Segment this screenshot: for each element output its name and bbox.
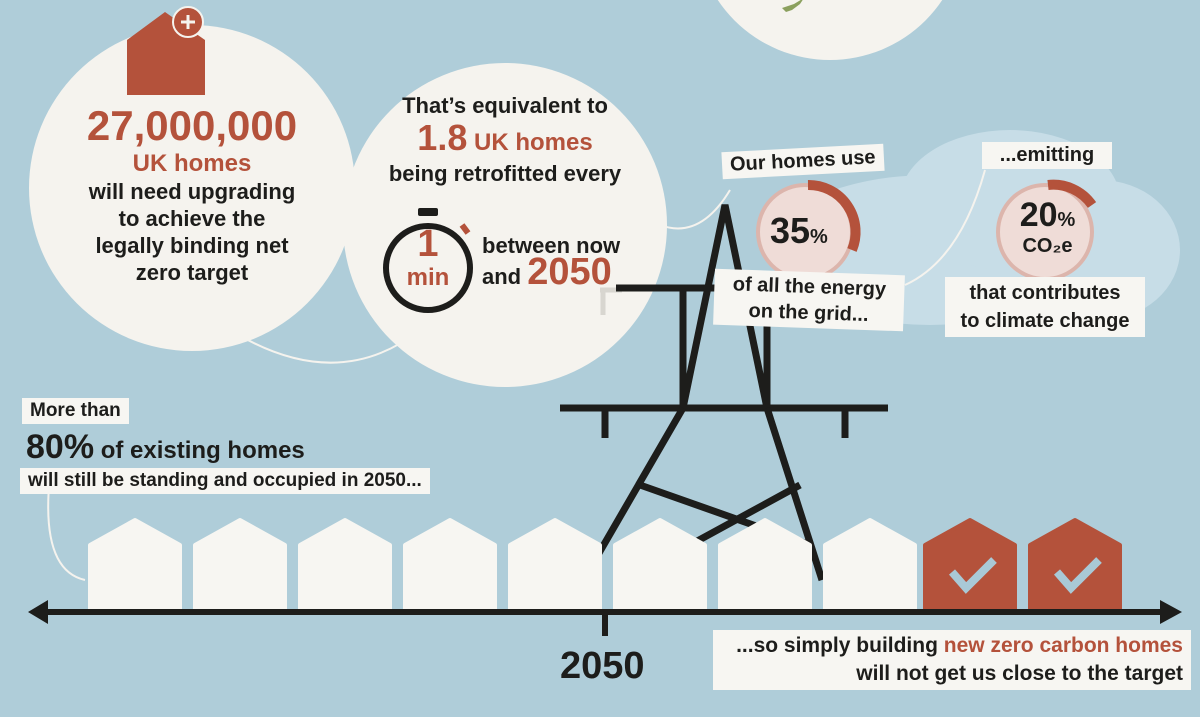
text: between now and 2050: and 2050 xyxy=(482,251,612,293)
text: 1 min xyxy=(407,223,449,291)
pylon xyxy=(560,205,888,580)
label: emitting xyxy=(982,142,1112,169)
text: 80% existing homes: 80% of existing homes xyxy=(26,428,305,466)
clouds xyxy=(770,130,1180,325)
label: 2050: 2050 xyxy=(560,645,645,687)
label: 20%: 20% xyxy=(1020,196,1075,234)
house icon xyxy=(127,7,205,95)
label: 35%: 35% xyxy=(770,210,828,251)
text: between now and 2050: between now xyxy=(482,233,620,258)
donut 35 xyxy=(758,185,856,279)
connector lines xyxy=(215,320,420,363)
label: climate xyxy=(945,277,1145,337)
text: 27,000,000: to achieve the xyxy=(119,206,265,231)
label: 20% xyxy=(1020,196,1075,257)
text: between now and 2050 xyxy=(482,233,620,293)
label: 20%: CO₂e xyxy=(1022,235,1072,257)
text: 80% existing homes: More than xyxy=(30,400,121,421)
label: of all energy: on the grid... xyxy=(748,300,869,326)
label: climate: that contributes xyxy=(969,282,1121,304)
text: 1 min: min xyxy=(407,264,449,291)
text: equivalent: That’s equivalent to xyxy=(402,93,608,118)
text: new zero carbon: ...so simply building new zero carbon homes xyxy=(736,634,1183,657)
text: 27,000,000: legally binding net xyxy=(95,233,289,258)
donut 20 xyxy=(998,185,1092,279)
text: 27,000,000: UK homes xyxy=(133,150,251,177)
text: 27,000,000: 27,000,000 xyxy=(87,102,297,149)
text: 27,000,000: will need upgrading xyxy=(89,179,295,204)
stopwatch xyxy=(386,208,470,310)
text: 80% existing homes: will still be standing and occupied in 2050... xyxy=(28,470,422,491)
text: equivalent: being retrofitted every xyxy=(389,161,621,186)
label: of all energy: of all the energy xyxy=(732,273,886,301)
houses xyxy=(90,520,915,610)
text: new zero carbon xyxy=(713,630,1191,690)
text: 80% existing homes xyxy=(20,398,430,494)
circles xyxy=(29,25,355,351)
top map circle xyxy=(695,0,965,60)
text: new zero carbon: will not get us close to the target xyxy=(856,662,1183,685)
label: emitting: ...emitting xyxy=(1000,144,1094,166)
label: of all energy xyxy=(713,269,905,331)
text: 27,000,000 xyxy=(87,102,297,285)
text: equivalent xyxy=(389,93,621,186)
text: 1 min: 1 xyxy=(417,223,439,265)
text: 27,000,000: zero target xyxy=(136,260,248,285)
text: equivalent: 1.8 UK homes xyxy=(417,117,593,158)
timeline xyxy=(40,612,1165,636)
label: climate: to climate change xyxy=(961,310,1129,332)
label: our homes use: Our homes use xyxy=(729,146,876,176)
